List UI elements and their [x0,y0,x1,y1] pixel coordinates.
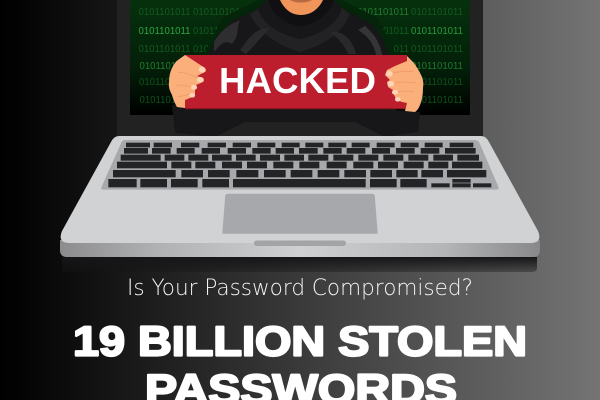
subtitle: Is Your Password Compromised? [127,276,473,301]
green binary screen: 0101101011 [193,7,245,18]
green binary screen [130,0,470,115]
green binary screen: 0101101011 [139,77,191,88]
laptop screen bezel [117,0,483,137]
hacked sign [185,55,407,109]
laptop base side [60,240,540,257]
green binary screen: 0101101011 [411,95,463,106]
green binary screen: 0101101011 [357,44,409,55]
green binary screen: 0101101011 [193,44,245,55]
green binary screen: 0101101011 [411,77,463,88]
right hand [385,56,423,112]
green binary screen: 0101101011 [140,95,192,106]
front notch [254,240,346,246]
green binary screen: 0101101011 [140,61,192,72]
green binary screen: 0101101011 [357,26,409,37]
laptop illustration [60,0,540,272]
face and neck [280,0,323,15]
hacker figure [172,0,420,137]
green binary screen: 0101101011 [411,61,463,72]
green binary screen: 0101101011 [357,7,409,18]
green binary screen: 0101101011 [193,26,245,37]
hooded body [172,0,420,137]
hood folds [250,8,350,52]
left hand [169,55,206,108]
sign text: HACKED [219,60,376,101]
title [73,318,527,400]
green binary screen: 0101101011 [411,44,463,55]
trackpad [222,194,378,234]
laptop deck [61,136,539,243]
green binary screen: 0101101011 [138,26,191,37]
green binary screen: 0101101011 [411,7,463,18]
green binary screen: 0101101011 [138,7,191,18]
body glow [204,0,396,115]
keyboard well and keys [101,140,499,190]
green binary screen: 0101101011 [411,26,463,37]
laptop base shadow [62,257,537,272]
green binary screen: 0101101011 [138,44,191,55]
title: 19 BILLION STOLEN [73,318,527,364]
